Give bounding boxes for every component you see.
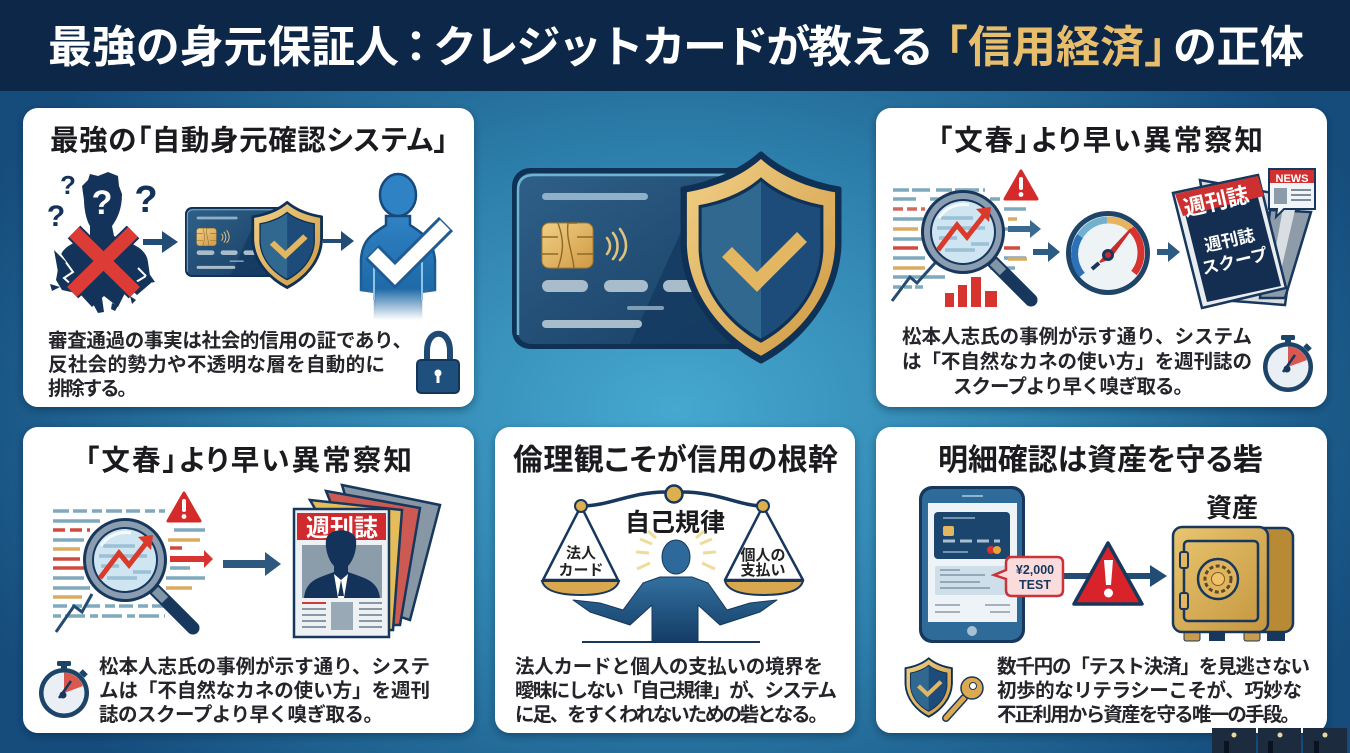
body text xyxy=(48,329,412,400)
icon: balance scale and person: 個人の xyxy=(740,547,786,564)
body text xyxy=(515,656,837,726)
body text: 誌のスクープより早く嗅ぎ取る。 xyxy=(99,703,383,726)
icon: data stream under magnifier xyxy=(892,171,1041,307)
icon: weekly magazine stack xyxy=(1173,169,1315,308)
body text: 初歩的なリテラシーこそが、巧妙な xyxy=(997,679,1302,702)
icon: speed gauge xyxy=(1066,211,1150,295)
panel: anomaly detection (bottom left) xyxy=(23,427,474,733)
body text: 排除する。 xyxy=(48,378,137,400)
icon: unknown person crossed out: ? xyxy=(60,170,76,200)
icon: warning xyxy=(1074,543,1142,604)
body text: スクープより早く嗅ぎ取る。 xyxy=(953,375,1193,398)
body text: 曖昧にしない「自己規律」が、システム xyxy=(515,679,837,702)
body text: 審査通過の事実は社会的信用の証であり、 xyxy=(48,329,412,352)
title: 最強の身元保証人 xyxy=(48,23,399,72)
icon: weekly magazine stack: 週刊誌 xyxy=(1203,226,1257,256)
title: クレジットカードが教える xyxy=(433,23,934,72)
body text xyxy=(997,656,1310,726)
icon: stopwatch xyxy=(39,661,89,718)
icon: unknown person crossed out xyxy=(47,170,158,313)
icon: shield and key xyxy=(905,658,983,718)
icon: weekly magazine stack: 週刊誌 xyxy=(1181,182,1251,221)
icon: balance scale and person: 自己規律 xyxy=(625,509,725,537)
icon: unknown person crossed out: ? xyxy=(134,179,158,221)
heading: 明細確認は資産を守る砦 xyxy=(938,444,1263,477)
center hero: credit card with shield xyxy=(512,154,839,361)
icon: weekly magazine stack: スクープ xyxy=(1200,245,1270,278)
callout: ¥2,000 test charge xyxy=(994,557,1063,596)
icon: padlock xyxy=(417,334,459,393)
arrow xyxy=(1033,242,1060,262)
panel: statement check protects assets xyxy=(876,427,1327,733)
callout: ¥2,000 test charge: ¥2,000 xyxy=(1016,563,1054,577)
body text: に足、をすくわれないための砦となる。 xyxy=(515,704,828,726)
title: 「信用経済」 xyxy=(924,23,1188,72)
body text: 松本人志氏の事例が示す通り、システ xyxy=(99,655,430,678)
arrow xyxy=(1157,242,1180,262)
corner thumbnail strip xyxy=(1212,728,1347,753)
heading: 最強の「自動身元確認システム」 xyxy=(50,125,448,157)
callout: ¥2,000 test charge: TEST xyxy=(1019,578,1051,592)
icon: stopwatch xyxy=(1263,335,1313,392)
icon: balance scale and person: カード xyxy=(558,562,604,579)
panel: automatic identity check xyxy=(23,108,474,407)
icon: weekly magazine stack: NEWS xyxy=(1276,173,1308,185)
icon: balance scale and person: 法人 xyxy=(566,544,596,562)
body text: 反社会的勢力や不透明な層を自動的に xyxy=(48,354,385,376)
icon: magazine stack with silhouette: 週刊誌 xyxy=(306,515,378,542)
body text: 不正利用から資産を守る唯一の手段。 xyxy=(997,704,1300,726)
heading: 倫理観こそが信用の根幹 xyxy=(513,443,838,477)
icon: unknown person crossed out: ? xyxy=(92,184,112,222)
title banner xyxy=(0,0,1350,91)
panel: anomaly detection (top right) xyxy=(876,108,1327,407)
icon: tablet with statement xyxy=(919,486,1025,643)
title xyxy=(48,23,1304,72)
icon: card and shield xyxy=(185,202,322,288)
icon: data stream under magnifier xyxy=(53,493,213,632)
icon: unknown person crossed out: ? xyxy=(47,200,65,233)
heading: 「文春」より早い異常察知 xyxy=(938,125,1263,157)
icon: magazine stack with silhouette xyxy=(294,485,440,637)
panel: ethics as root of credit xyxy=(495,427,855,733)
icon: gold safe xyxy=(1173,527,1293,641)
icon: balance scale and person xyxy=(542,486,803,642)
heading: 「文春」より早い異常察知 xyxy=(85,445,412,477)
arrow xyxy=(143,231,178,253)
arrow xyxy=(223,552,281,576)
title: の正体 xyxy=(1173,23,1304,72)
body text: 法人カードと個人の支払いの境界を xyxy=(515,656,823,678)
title: ： xyxy=(394,23,438,72)
arrow xyxy=(323,231,354,251)
body text: は「不自然なカネの使い方」を週刊誌の xyxy=(902,350,1252,373)
label: assets: 資産 xyxy=(1206,493,1258,523)
body text: 松本人志氏の事例が示す通り、システム xyxy=(902,325,1252,348)
arrow xyxy=(1060,565,1167,587)
icon: verified person xyxy=(361,174,446,320)
body text: ムは「不自然なカネの使い方」を週刊 xyxy=(99,679,430,702)
icon: balance scale and person: 支払い xyxy=(740,561,786,579)
body text xyxy=(902,325,1252,398)
body text: 数千円の「テスト決済」を見逃さない xyxy=(997,656,1310,678)
body text xyxy=(99,655,430,726)
